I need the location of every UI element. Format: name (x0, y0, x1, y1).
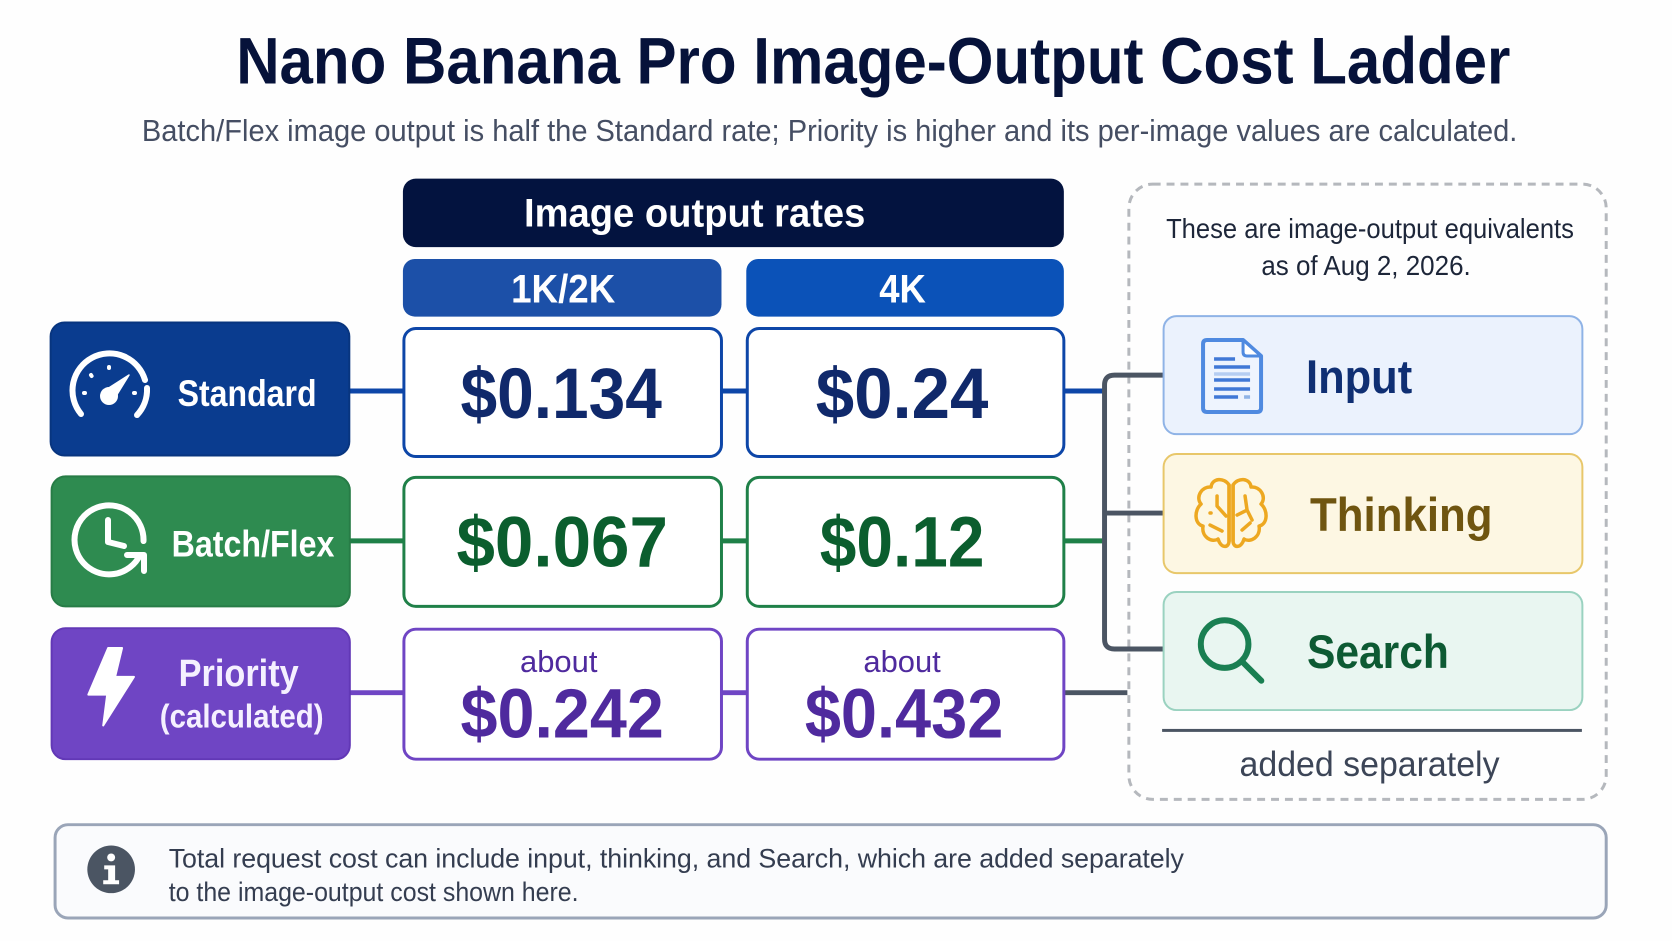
rate cell: Priority 4K (747, 629, 1064, 759)
tier: Standard (51, 323, 349, 456)
card: Search (1164, 592, 1582, 710)
card: Thinking: Thinking (1310, 489, 1493, 542)
rate cell: Batch/Flex 1K/2K: $0.067 (457, 503, 668, 583)
rate cell: Priority 1K/2K (404, 629, 721, 759)
tier: Batch/Flex (52, 476, 350, 606)
card: Thinking (1164, 454, 1582, 573)
card: Input: Input (1306, 351, 1412, 404)
title: Nano Banana Pro Image-Output Cost Ladder (236, 24, 1510, 97)
rate cell: Priority 4K: about (863, 644, 941, 679)
footer callout (55, 825, 1606, 918)
icon: lightning bolt (88, 648, 134, 725)
bracket connector (1105, 375, 1163, 649)
icon: clock with arrow (75, 505, 144, 574)
icon: brain (1196, 480, 1266, 546)
panel: table header (403, 179, 1064, 317)
rate cell: Standard 1K/2K: $0.134 (460, 354, 662, 434)
panel: added separately (1105, 184, 1606, 799)
icon: info (87, 846, 135, 893)
tier: Batch/Flex: Batch/Flex (172, 524, 335, 565)
column header: 4K (746, 259, 1064, 317)
column header: 4K: 4K (879, 268, 926, 312)
icon: magnifier (1201, 620, 1261, 681)
note text: as of Aug 2, 2026. (1261, 250, 1471, 281)
rate cell: Batch/Flex 1K/2K (404, 477, 721, 606)
rate cell: Standard 4K (747, 328, 1064, 457)
icon: document (1203, 340, 1261, 412)
tier: Priority (calculated): Priority (179, 652, 299, 694)
rate cell: Batch/Flex 4K: $0.12 (820, 503, 984, 583)
rate cell: Batch/Flex 4K (747, 477, 1064, 606)
tier: Priority (calculated) (52, 628, 350, 759)
caption: added separately: added separately (1240, 746, 1500, 784)
card: Input (1164, 316, 1582, 434)
rate cell: Priority 1K/2K: $0.242 (460, 674, 664, 752)
header: image output rates: Image output rates (524, 191, 865, 235)
tier: Priority (calculated): (calculated) (160, 697, 324, 735)
rate cell: Standard 1K/2K (404, 328, 721, 457)
rate cell: Priority 1K/2K: about (520, 644, 598, 679)
column header: 1K/2K (403, 259, 721, 317)
subtitle: Batch/Flex image output is half the Standard rate; Priority is higher and its per-image values are calculated. (142, 113, 1517, 148)
rate cell: Priority 4K: $0.432 (805, 674, 1003, 752)
tier: Standard: Standard (178, 373, 317, 414)
card: Search: Search (1307, 626, 1449, 679)
icon: speedometer gauge (72, 353, 147, 415)
note text: to the image-output cost shown here. (169, 877, 579, 907)
note text: Total request cost can include input, thinking, and Search, which are added separately (169, 843, 1185, 873)
column header: 1K/2K: 1K/2K (511, 268, 616, 312)
note text: These are image-output equivalents (1166, 213, 1574, 244)
header: image output rates (403, 179, 1064, 247)
connectors: tiers to rate cells (349, 391, 1127, 693)
rate cell: Standard 4K: $0.24 (816, 354, 989, 434)
